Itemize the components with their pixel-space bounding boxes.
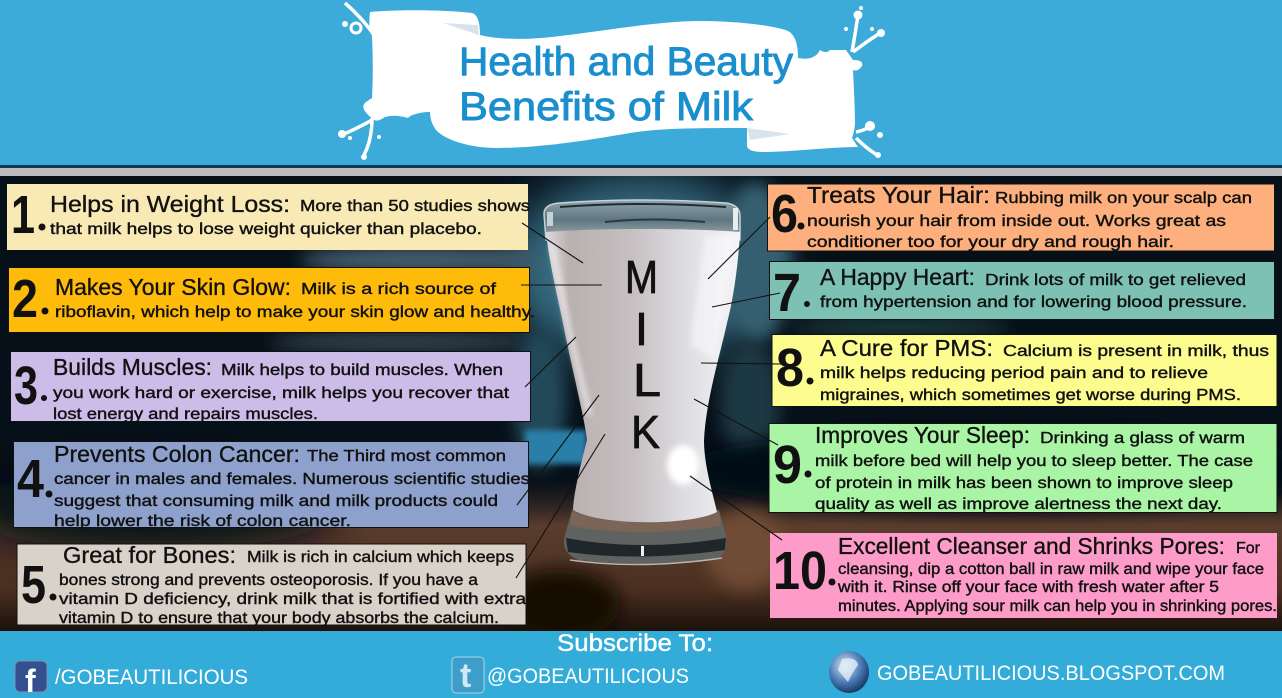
panel: 6 hair: conditioner too for your dry and rough hair.: [807, 234, 1174, 251]
panel: 6 hair: 6: [771, 184, 798, 244]
panel: 7 heart: [770, 262, 1274, 323]
top header band: [0, 0, 1282, 176]
panel: 7 heart: A Happy Heart:: [820, 264, 975, 290]
panel: 10 cleanser: For: [1236, 540, 1261, 557]
panel: 10 cleanser: Excellent Cleanser and Shrinks Pores:: [838, 533, 1225, 559]
panel: 5 bones: 5: [21, 555, 46, 615]
panel: 3 muscles: you work hard or exercise, milk helps you recover that: [53, 385, 510, 402]
panel: 4 colon cancer: suggest that consuming milk and milk products could: [54, 493, 498, 510]
panel: 8 PMS: 8: [776, 338, 804, 398]
panel: 6 hair: Rubbing milk on your scalp can: [995, 190, 1252, 207]
icon: twitter: t: [460, 657, 471, 695]
panel: 5 bones: bones strong and prevents osteoporosis. If you have a: [59, 572, 478, 589]
panel: 1 weight loss: 1: [11, 185, 35, 245]
milk splash banner: [338, 3, 884, 160]
panel: 7 heart: Drink lots of milk to get relieved: [985, 272, 1246, 289]
photo background: [0, 170, 1282, 640]
panel: 9 sleep: 9: [773, 435, 802, 495]
panel: 3 muscles: lost energy and repairs muscles.: [53, 406, 318, 423]
panel: 7 heart: from hypertension and for lowering blood pressure.: [820, 294, 1247, 311]
facebook handle: /GOBEAUTILICIOUS: [55, 666, 248, 689]
panel: 3 muscles: Builds Muscles:: [53, 354, 212, 380]
panel: 9 sleep: [769, 422, 1277, 513]
panel: 8 PMS: [772, 334, 1277, 406]
leader lines: [516, 217, 782, 578]
panel: 6 hair: nourish your hair from inside out. Works great as: [807, 213, 1226, 230]
panel: 1 weight loss: [7, 184, 530, 250]
panel: 4 colon cancer: The Third most common: [307, 448, 506, 465]
title: Health and Beauty: [459, 40, 793, 84]
panel: 5 bones: vitamin D to ensure that your body absorbs the calcium.: [59, 610, 499, 627]
icon: facebook: [15, 661, 47, 698]
panel: 8 PMS: Calcium is present in milk, thus: [1003, 343, 1269, 360]
MILK vertical label: M: [625, 251, 658, 303]
subscribe heading: Subscribe To:: [557, 630, 713, 657]
title: [459, 40, 793, 129]
MILK vertical label: I: [635, 303, 648, 355]
panel: 1 weight loss: Helps in Weight Loss:: [50, 191, 290, 217]
panel: 2 skin glow: riboflavin, which help to make your skin glow and healthy.: [55, 304, 535, 321]
panel: 9 sleep: quality as well as improve alertness the next day.: [815, 496, 1222, 513]
panel: 2 skin glow: Makes Your Skin Glow:: [55, 274, 291, 300]
footer band: [0, 631, 1282, 698]
panel: 3 muscles: Milk helps to build muscles. When: [221, 362, 503, 379]
panel: 5 bones: Milk is rich in calcium which keeps: [247, 549, 514, 566]
twitter handle: @GOBEAUTILICIOUS: [487, 665, 689, 688]
MILK vertical label: K: [631, 406, 660, 458]
panel: 10 cleanser: 10: [773, 541, 827, 601]
icon: globe: [829, 651, 869, 693]
panel: 1 weight loss: More than 50 studies shows: [300, 198, 530, 215]
panel: 10 cleanser: [770, 533, 1277, 618]
MILK vertical label: [625, 251, 661, 458]
panel: 4 colon cancer: help lower the risk of colon cancer.: [54, 513, 351, 530]
panel: 4 colon cancer: [14, 441, 530, 530]
panel: 10 cleanser: cleansing, dip a cotton ball in raw milk and wipe your face: [838, 561, 1264, 578]
panel: 2 skin glow: [8, 268, 535, 332]
panel: 6 hair: [768, 182, 1274, 251]
panel: 5 bones: [17, 542, 526, 627]
panel: 4 colon cancer: cancer in males and females. Numerous scientific studies: [54, 471, 530, 488]
panel: 9 sleep: milk before bed will help you to sleep better. The case: [815, 453, 1253, 470]
MILK vertical label: L: [633, 354, 661, 406]
panel: 2 skin glow: Milk is a rich source of: [301, 281, 497, 298]
panel: 9 sleep: of protein in milk has been shown to improve sleep: [815, 475, 1233, 492]
panel: 3 muscles: [10, 352, 530, 423]
panel: 2 skin glow: 2: [12, 269, 38, 329]
website address: GOBEAUTILICIOUS.BLOGSPOT.COM: [877, 662, 1225, 685]
panel: 8 PMS: milk helps reducing period pain and to relieve: [820, 365, 1208, 382]
panel: 9 sleep: Improves Your Sleep:: [815, 422, 1030, 448]
panel: 1 weight loss: that milk helps to lose weight quicker than placebo.: [50, 221, 482, 238]
panel: 6 hair: Treats Your Hair:: [807, 182, 990, 208]
panel: 3 muscles: 3: [14, 356, 38, 416]
panel: 4 colon cancer: Prevents Colon Cancer:: [54, 441, 300, 467]
panel: 5 bones: Great for Bones:: [63, 542, 236, 568]
panel: 8 PMS: A Cure for PMS:: [820, 335, 993, 361]
glass of milk: [544, 200, 740, 565]
panel: 8 PMS: migraines, which sometimes get worse during PMS.: [820, 387, 1241, 404]
panel: 10 cleanser: minutes. Applying sour milk can help you in shrinking pores.: [838, 598, 1277, 615]
panel: 5 bones: vitamin D deficiency, drink milk that is fortified with extra: [59, 591, 526, 608]
panel: 10 cleanser: with it. Rinse off your face with fresh water after 5: [837, 579, 1219, 596]
icon: facebook: f: [25, 663, 36, 698]
icon: twitter: [452, 657, 484, 695]
panel: 4 colon cancer: 4: [17, 449, 44, 509]
panel: 9 sleep: Drinking a glass of warm: [1040, 430, 1245, 447]
title: Benefits of Milk: [459, 85, 754, 129]
panel: 7 heart: 7: [773, 263, 801, 323]
